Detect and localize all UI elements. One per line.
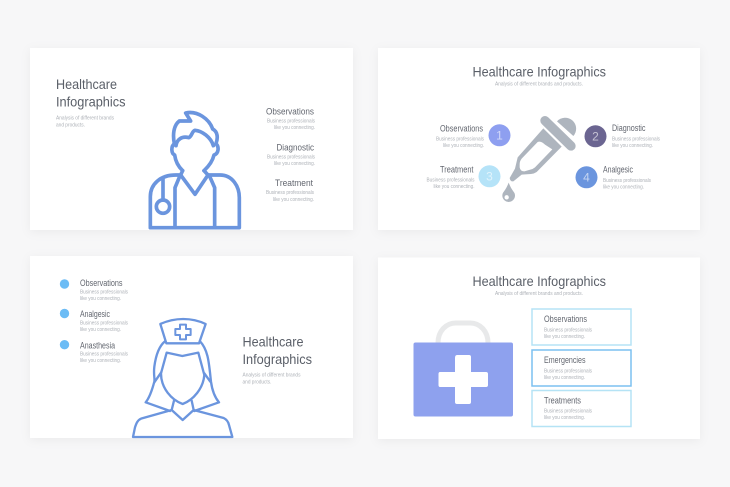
subtitle: doctor slide: and products.: [56, 122, 85, 128]
label: Treatment: [266, 178, 314, 203]
title: nurse slide: [242, 334, 312, 367]
step 1: Observations: Observations: [440, 124, 483, 134]
list item: Anasthesia: Anasthesia: [80, 340, 115, 350]
step 1: Observations: [436, 124, 510, 149]
title: nurse slide: Infographics: [242, 351, 312, 367]
list item: Analgesic: Analgesic: [80, 309, 110, 319]
icon: nurse: [133, 319, 232, 437]
box: Emergencies: [532, 350, 631, 386]
step 2: Diagnostic: like you connecting.: [612, 143, 653, 149]
icon: medical kit: [414, 323, 513, 416]
step 4: Analgesic: like you connecting.: [603, 184, 644, 190]
subtitle: medical kit slide: Analysis of different brands and products.: [495, 291, 583, 297]
box: Treatments: Business professionals: [544, 408, 592, 414]
step 1: Observations: Business professionals: [436, 136, 484, 142]
step 2: Diagnostic: Business professionals: [612, 136, 660, 142]
subtitle: nurse slide: and products.: [242, 380, 272, 386]
box: Observations: like you connecting.: [544, 334, 585, 340]
step 4: Analgesic: Business professionals: [603, 178, 651, 184]
box: Emergencies: Emergencies: [544, 355, 586, 365]
title: doctor slide: Infographics: [56, 94, 126, 110]
list item: Analgesic: Business professionals: [80, 320, 128, 326]
box: Emergencies: Business professionals: [544, 368, 592, 374]
icon: doctor: [150, 113, 239, 228]
label: Diagnostic: Diagnostic: [276, 142, 314, 152]
step 4: Analgesic: Analgesic: [603, 164, 633, 174]
list item: Anasthesia: [60, 340, 128, 364]
step 3: Treatment: Treatment: [440, 164, 474, 174]
title: doctor slide: [56, 76, 126, 110]
step 3: Treatment: [426, 164, 500, 190]
list item: Observations: like you connecting.: [80, 296, 121, 302]
label: Observations: Observations: [266, 106, 314, 116]
list item: Anasthesia: like you connecting.: [80, 358, 121, 364]
step 3: Treatment: Business professionals: [426, 178, 475, 184]
label: Diagnostic: Business professionals: [267, 154, 315, 160]
box: Emergencies: like you connecting.: [544, 375, 585, 381]
title: nurse slide: Healthcare: [242, 334, 304, 350]
label: Observations: Business professionals: [267, 118, 315, 124]
step 2: Diagnostic: 2: [592, 130, 599, 144]
box: Treatments: [532, 390, 631, 426]
subtitle: doctor slide: [56, 116, 114, 128]
subtitle: dropper slide: Analysis of different brands and products.: [495, 82, 583, 88]
list item: Observations: Business professionals: [80, 290, 128, 296]
list item: Anasthesia: Business professionals: [80, 352, 128, 358]
panel: nurse slide: [30, 256, 353, 438]
step 4: Analgesic: 4: [583, 171, 590, 185]
subtitle: nurse slide: Analysis of different brands: [242, 372, 301, 378]
box: Observations: Observations: [544, 314, 587, 324]
list item: Observations: Observations: [80, 278, 123, 288]
list item: Observations: [60, 278, 128, 302]
step 1: Observations: 1: [496, 129, 503, 143]
label: Treatment: Business professionals: [266, 190, 314, 196]
subtitle: nurse slide: [242, 372, 301, 386]
title: doctor slide: Healthcare: [56, 76, 117, 92]
step 1: Observations: like you connecting.: [443, 143, 484, 149]
subtitle: doctor slide: Analysis of different brands: [56, 116, 114, 122]
icon: dropper: [502, 118, 576, 202]
label: Observations: [266, 106, 315, 131]
box: Treatments: Treatments: [544, 396, 581, 406]
list item: Analgesic: like you connecting.: [80, 327, 121, 333]
label: Diagnostic: [267, 142, 315, 167]
label: Observations: like you connecting.: [274, 125, 315, 131]
step 4: Analgesic: [576, 164, 651, 190]
panel: doctor slide: [30, 48, 353, 230]
step 2: Diagnostic: [584, 123, 660, 149]
list item: Analgesic: [60, 309, 128, 333]
title: dropper slide: Healthcare Infographics: [472, 64, 606, 80]
step 3: Treatment: 3: [486, 170, 493, 184]
box: Treatments: like you connecting.: [544, 415, 585, 421]
step 2: Diagnostic: Diagnostic: [612, 123, 646, 133]
box: Observations: Business professionals: [544, 328, 592, 334]
box: Observations: [532, 309, 631, 345]
label: Treatment: Treatment: [275, 178, 313, 188]
panel: dropper slide: [378, 48, 700, 230]
step 3: Treatment: like you connecting.: [434, 184, 474, 190]
label: Diagnostic: like you connecting.: [274, 161, 315, 167]
title: medical kit slide: Healthcare Infographics: [472, 273, 606, 289]
panel: medical kit slide: [378, 258, 700, 439]
label: Treatment: like you connecting.: [273, 197, 314, 203]
